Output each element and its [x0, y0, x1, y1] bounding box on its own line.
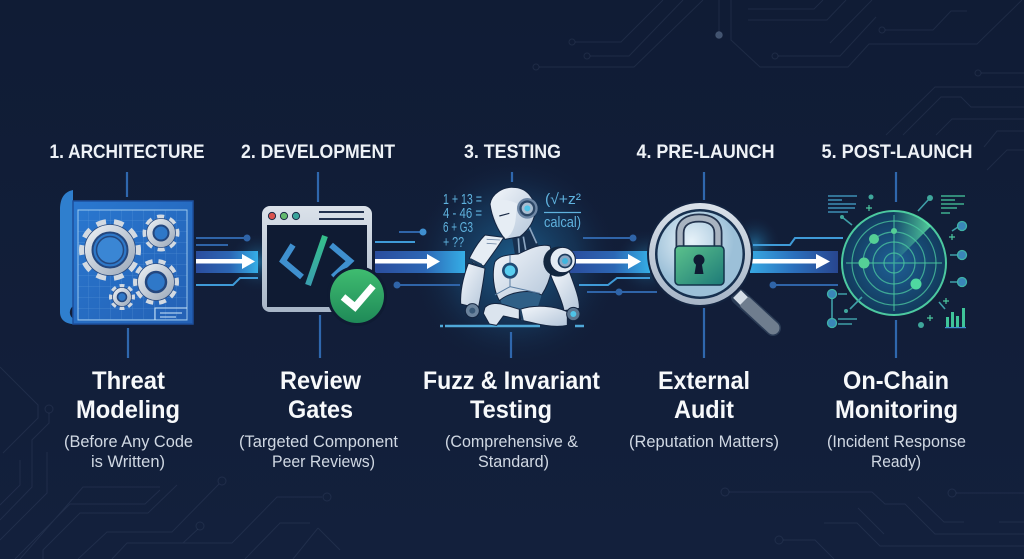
step 1 subtitle: (Before Any Code [64, 433, 193, 451]
glow behind robot and arrows [228, 157, 781, 367]
circuit pattern: bottom left [0, 367, 340, 559]
step 2 title: Gates [288, 396, 353, 424]
step 3 title: Fuzz & Invariant [423, 367, 601, 395]
panel: step 2 development [239, 141, 398, 471]
step 3 subtitle: (Comprehensive & [445, 433, 578, 451]
step 1 connector lines [127, 172, 128, 358]
step 2 subtitle: Peer Reviews) [272, 453, 375, 471]
icon: magnifying glass with padlock [648, 202, 773, 328]
icon: thinking robot [461, 187, 580, 326]
arrow 1 to 2 [196, 234, 258, 285]
step 3 title: Testing [470, 396, 552, 424]
robot head [490, 187, 538, 239]
math formulas right: calcal) [544, 214, 581, 231]
step 5 connector lines [895, 172, 897, 358]
robot right arm [520, 247, 580, 326]
panel: step 5 post-launch [822, 141, 972, 471]
robot resting hand [483, 303, 519, 325]
step 5 subtitle: Ready) [871, 453, 921, 471]
math formulas right [544, 191, 581, 231]
step 2 subtitle: (Targeted Component [239, 433, 398, 451]
icon: medium gear [136, 262, 176, 302]
robot neck [512, 230, 540, 255]
math formulas left: 6 + G3 [443, 219, 473, 236]
step 4 title: Audit [674, 396, 735, 424]
step 5 subtitle: (Incident Response [827, 433, 966, 451]
step 2 connector lines [318, 172, 320, 358]
step 1 label: 1. ARCHITECTURE [50, 141, 204, 163]
radar side nodes [832, 199, 958, 324]
data lines left [828, 196, 857, 212]
step 4 connector lines [703, 172, 705, 358]
math formulas left: 4 - 46 = [443, 205, 482, 222]
circuit pattern: bottom right [721, 488, 1024, 559]
step 5 label: 5. POST-LAUNCH [822, 141, 972, 163]
step 4 title: External [658, 367, 750, 395]
math formulas left [443, 191, 482, 251]
step 1 title: Modeling [76, 396, 180, 424]
icon: large gear [82, 222, 138, 278]
step 4 subtitle: (Reputation Matters) [629, 433, 779, 451]
arrow 3 to 4 [570, 234, 657, 296]
circuit pattern: top right [533, 0, 1024, 170]
panel: step 4 pre-launch [629, 141, 779, 451]
mini bar chart [945, 308, 966, 328]
math formulas right: (√+z² [545, 191, 581, 208]
robot torso [493, 245, 552, 311]
table line [440, 325, 584, 327]
data lines right [941, 196, 965, 213]
icon: blueprint with gears [60, 190, 193, 324]
plus marks [866, 205, 955, 321]
math formulas left: + ?? [443, 234, 464, 251]
math formulas left: 1 + 13 = [443, 191, 482, 208]
robot left arm and chin hand [461, 235, 504, 318]
step 1 subtitle: is Written) [91, 453, 165, 471]
panel: step 1 architecture [50, 141, 204, 471]
icon: small gear top [145, 217, 177, 249]
step 2 title: Review [280, 367, 362, 395]
step 1 title: Threat [92, 367, 166, 395]
step 3 subtitle: Standard) [478, 453, 549, 471]
icon: code browser window [262, 206, 387, 326]
arrow 4 to 5 [750, 238, 843, 288]
step 3 label: 3. TESTING [464, 141, 561, 163]
icon: tiny gear [111, 286, 133, 308]
step 5 title: On-Chain [843, 367, 949, 395]
arrow 2 to 3 [375, 228, 465, 288]
icon: green check badge [327, 266, 387, 326]
panel: step 3 testing [423, 141, 601, 471]
step 5 title: Monitoring [835, 396, 958, 424]
icon: radar monitor [828, 194, 966, 328]
step 2 label: 2. DEVELOPMENT [241, 141, 395, 163]
step 3 connector lines [511, 172, 512, 358]
step 4 label: 4. PRE-LAUNCH [636, 141, 774, 163]
